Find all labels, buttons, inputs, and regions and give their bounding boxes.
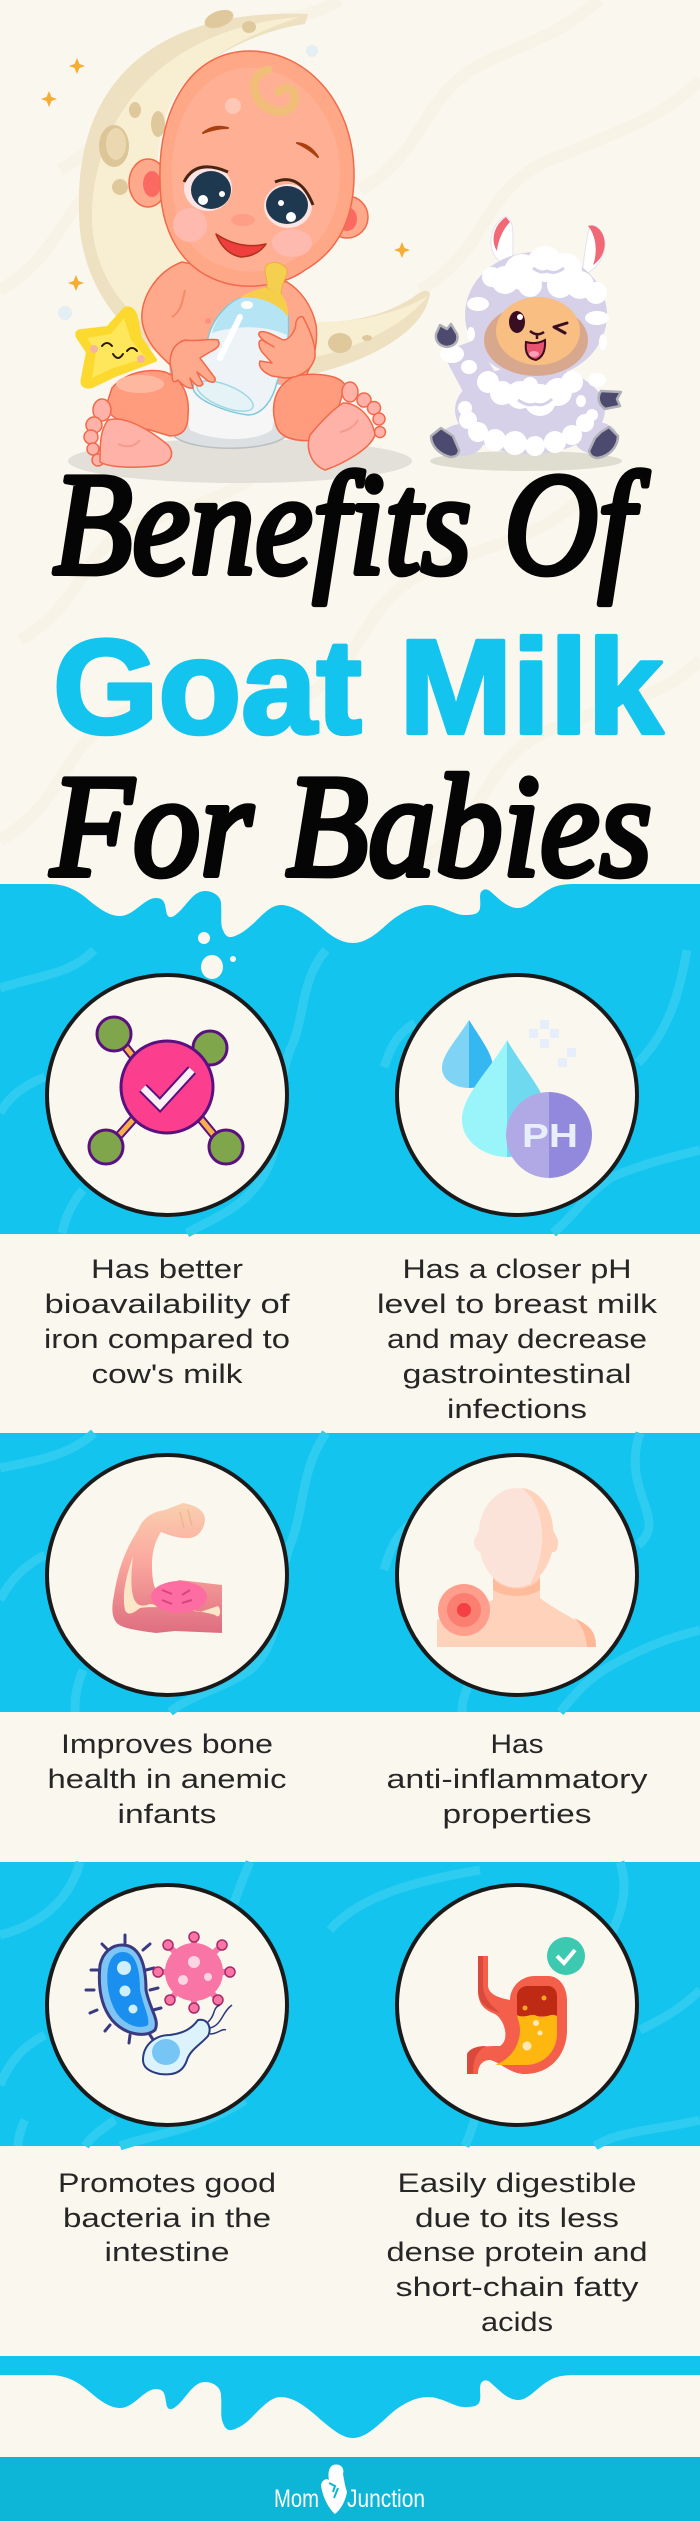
text: benefit 3 caption: infants — [118, 1799, 216, 1829]
panel: benefit 6 digestion — [397, 1885, 637, 2125]
text: benefit 2 caption: and may decrease — [387, 1324, 647, 1354]
text: benefit 6 caption: dense protein and — [386, 2237, 648, 2267]
text: benefit 5 caption: Promotes good — [58, 2168, 276, 2198]
right hand — [259, 317, 315, 378]
eyebrows — [203, 127, 318, 157]
text: benefit 1 caption: iron compared to — [44, 1324, 290, 1354]
mouth — [216, 234, 266, 257]
right ear — [326, 196, 368, 238]
text: benefit 2 caption: gastrointestinal — [402, 1359, 632, 1389]
left foot — [84, 399, 172, 467]
icon: germs — [86, 1932, 235, 2074]
text: benefit 5 caption — [58, 2168, 276, 2267]
text: benefit 2 caption: level to breast milk — [377, 1289, 658, 1319]
torso and arms — [142, 262, 317, 385]
text: benefit 1 caption: bioavailability of — [44, 1289, 290, 1319]
text: benefit 4 caption: Has — [490, 1729, 544, 1759]
llama face — [484, 297, 588, 376]
panel: benefit 1 iron — [47, 975, 287, 1215]
text: benefit 2 caption — [377, 1254, 658, 1424]
llama paws — [431, 324, 621, 458]
head — [160, 51, 354, 286]
text: benefit 6 caption: due to its less — [415, 2203, 619, 2233]
text: benefit 3 caption: Improves bone — [61, 1729, 273, 1759]
smiling star — [77, 308, 155, 387]
text: benefit 6 caption: Easily digestible — [398, 2168, 636, 2198]
circle badge — [47, 1455, 287, 1695]
text: benefit 3 caption — [48, 1729, 286, 1829]
logo icon — [321, 2465, 347, 2514]
circle badge — [397, 1455, 637, 1695]
text: benefit 3 caption: health in anemic — [48, 1764, 286, 1794]
text: benefit 5 caption: intestine — [104, 2237, 230, 2267]
left ear — [129, 159, 167, 207]
icon: person with sore shoulder — [437, 1488, 596, 1647]
icon: stomach with check — [467, 1937, 585, 2074]
left eye — [184, 165, 232, 211]
logo wordmark: Mom — [274, 2485, 319, 2513]
llama — [430, 216, 622, 471]
sparkles and bubbles — [41, 45, 410, 320]
virus — [153, 1932, 235, 2013]
ground shadow under baby — [68, 439, 412, 483]
panel: blue band 1 with milk drip edge — [0, 884, 700, 1234]
text: benefit 4 caption: anti-inflammatory — [386, 1764, 648, 1794]
bottle — [193, 263, 288, 417]
circle badge — [47, 1885, 287, 2125]
footer bar — [0, 2457, 700, 2521]
left hand — [170, 339, 219, 388]
text: benefit 2 caption: Has a closer pH — [402, 1254, 632, 1284]
llama white fleece — [440, 246, 609, 456]
left thigh — [106, 371, 188, 436]
icon: flexed arm — [112, 1503, 222, 1633]
text: benefit 6 caption — [386, 2168, 648, 2337]
flagellated bacterium — [143, 2020, 210, 2074]
crescent moon — [79, 6, 430, 381]
icon: molecule with check — [89, 1017, 243, 1164]
text: benefit 1 caption: cow's milk — [92, 1359, 243, 1389]
rod bacterium — [86, 1935, 161, 2043]
cheeks, nose — [173, 208, 207, 242]
llama ears — [491, 216, 605, 277]
title line: Goat Milk: Goat Milk — [53, 613, 663, 762]
circle badge — [397, 975, 637, 1215]
right eye — [264, 180, 313, 228]
hair curl — [254, 70, 295, 112]
panel: benefit 2 pH — [397, 975, 637, 1215]
milk droplets — [198, 932, 236, 979]
panel: blue band 3 — [0, 1862, 700, 2146]
right thigh — [274, 374, 345, 441]
panel: benefit 4 inflammation — [397, 1455, 637, 1695]
logo: MomJunction — [274, 2465, 425, 2514]
text: benefit 2 caption: infections — [447, 1394, 587, 1424]
circle badge — [47, 975, 287, 1215]
bottom blue drip — [0, 2356, 700, 2438]
text: benefit 5 caption: bacteria in the — [63, 2203, 271, 2233]
text: PH: PH — [522, 1117, 578, 1154]
text: benefit 6 caption: short-chain fatty — [396, 2272, 639, 2302]
text: benefit 1 caption — [44, 1254, 290, 1389]
title line: Benefits Of: Benefits Of — [53, 443, 650, 605]
circle badge — [397, 1885, 637, 2125]
text: benefit 1 caption: Has better — [91, 1254, 243, 1284]
text: benefit 6 caption: acids — [481, 2307, 553, 2337]
text: benefit 4 caption — [386, 1729, 648, 1829]
right foot — [308, 382, 386, 470]
title line: For Babies: For Babies — [50, 745, 652, 907]
panel: blue band 2 — [0, 1433, 700, 1712]
diaper — [170, 365, 285, 448]
panel: benefit 3 bone — [47, 1455, 287, 1695]
logo: MomJunction: Junction — [347, 2485, 425, 2513]
llama wool base — [440, 252, 618, 456]
llama shadow — [430, 451, 622, 471]
text: benefit 4 caption: properties — [442, 1799, 592, 1829]
illustration: baby on moon with llama — [41, 6, 622, 483]
baby — [84, 51, 386, 470]
icon: drops with pH — [442, 1020, 592, 1178]
title — [50, 443, 663, 907]
panel: benefit 5 bacteria — [47, 1885, 287, 2125]
